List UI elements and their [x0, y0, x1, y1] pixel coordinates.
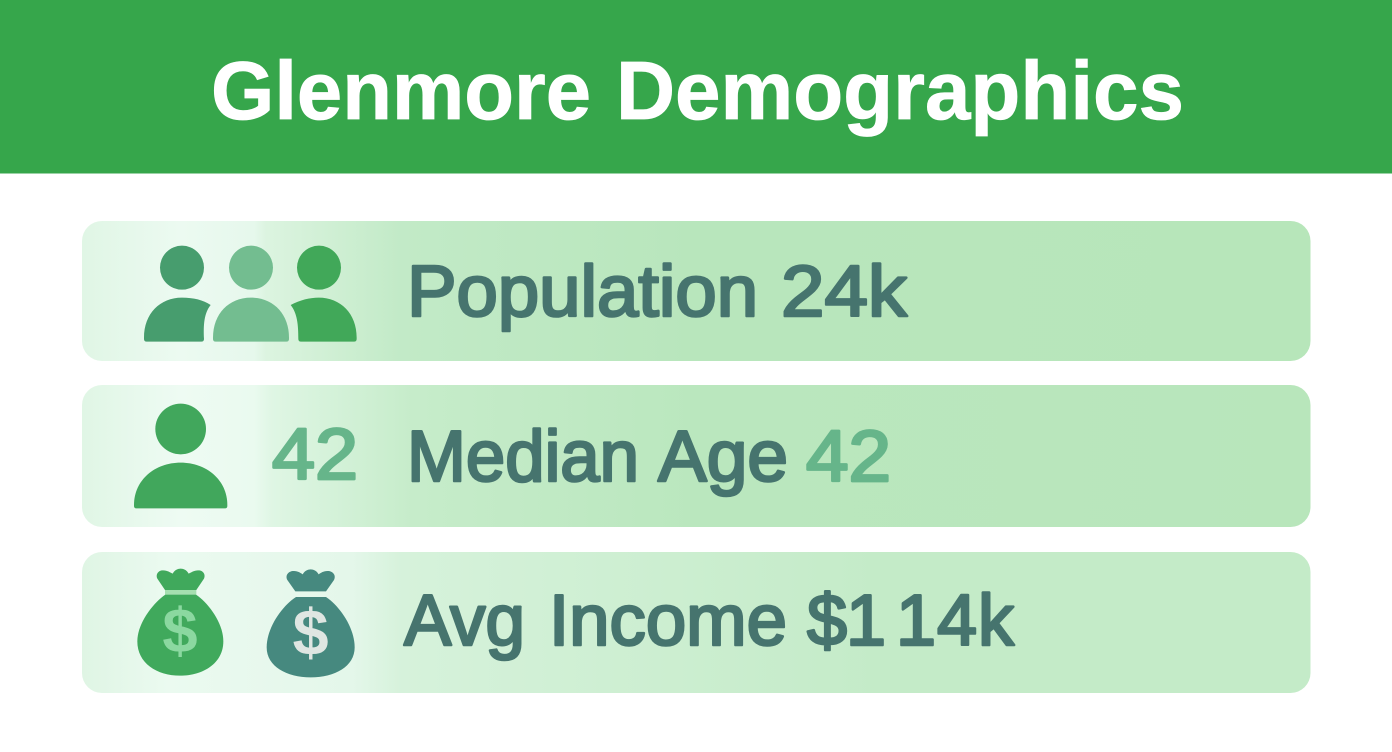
panel: average income	[82, 552, 1310, 693]
label: median age: Median	[407, 417, 639, 497]
icon: money bag green: $	[162, 596, 198, 666]
label: median age	[407, 417, 891, 497]
icon: person	[134, 404, 227, 508]
header banner	[0, 0, 1392, 174]
title: Glenmore	[211, 44, 591, 137]
label: average income: Income	[549, 581, 787, 661]
value: age 42: 42	[272, 415, 358, 495]
label: population: Population	[407, 252, 758, 332]
icon: money bag teal: $	[293, 596, 329, 669]
panel: population	[82, 221, 1310, 361]
icon: money bag teal	[267, 569, 355, 677]
title	[211, 44, 1184, 137]
label: population	[407, 252, 908, 332]
icon: money bag green	[137, 569, 223, 676]
title: Demographics	[616, 44, 1184, 137]
label: average income	[404, 581, 1015, 661]
icon: three people	[144, 246, 357, 342]
label: median age: Age	[658, 417, 788, 497]
panel: median age	[82, 385, 1310, 527]
label: average income: Avg	[404, 581, 525, 661]
label: median age: 42	[806, 417, 891, 497]
label: average income: $114k	[807, 581, 1015, 661]
label: population: 24k	[781, 252, 908, 332]
